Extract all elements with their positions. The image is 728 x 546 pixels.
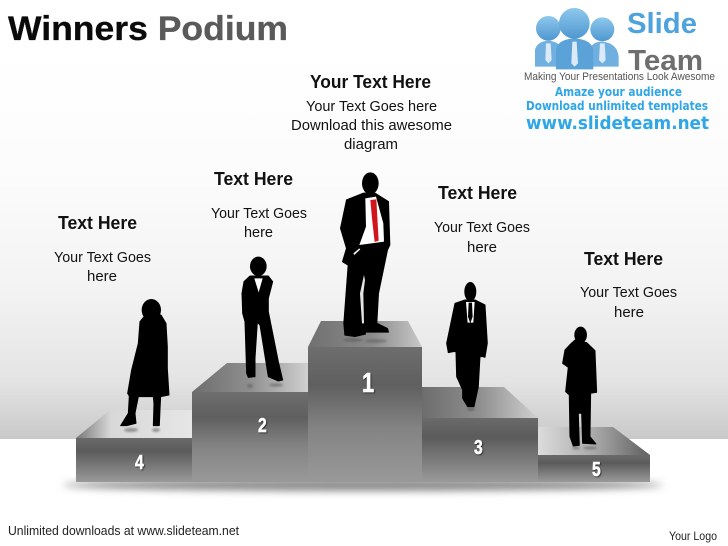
step 2 xyxy=(192,363,308,482)
red tie xyxy=(370,199,379,242)
logo url: www.slideteam.net xyxy=(526,113,709,134)
silhouette: man in suit, third place xyxy=(447,282,487,407)
icon: three business people xyxy=(535,8,619,69)
text block: second place: here xyxy=(244,224,273,241)
number 3: 3 xyxy=(474,436,483,458)
step 1 xyxy=(308,321,422,482)
number 4: 4 xyxy=(135,451,144,473)
shoe reflections xyxy=(124,338,597,450)
SlideTeam logo: Team xyxy=(628,45,703,77)
step 5 xyxy=(538,427,650,482)
number 2: 2 xyxy=(258,414,267,436)
text block: first place: Your Text Here xyxy=(310,72,431,92)
pocket highlight xyxy=(353,248,360,255)
text block: first place xyxy=(291,72,452,153)
title: Winners Podium xyxy=(8,10,288,48)
text block: fifth place: here xyxy=(614,304,644,321)
text block: second place xyxy=(211,169,307,241)
leg gap xyxy=(360,275,365,323)
text block: third place: here xyxy=(467,239,497,256)
text block: first place: diagram xyxy=(344,136,398,153)
text block: fourth place: Your Text Goes xyxy=(54,249,151,266)
shirt xyxy=(359,197,384,245)
SlideTeam logo: Download unlimited templates xyxy=(526,99,708,113)
text block: third place xyxy=(434,183,530,256)
silhouette: woman in dress, fourth place xyxy=(121,299,169,426)
step 4 xyxy=(76,410,192,482)
footer: downloads note: Unlimited downloads at www.slideteam.net xyxy=(8,523,239,538)
logo wordmark: Slide xyxy=(627,8,697,40)
logo promo text: Amaze your audience xyxy=(555,85,682,99)
silhouette: man on phone, fifth place xyxy=(563,327,597,446)
text block: fourth place: here xyxy=(87,268,117,285)
logo tagline: Making Your Presentations Look Awesome xyxy=(524,71,715,83)
text block: first place: Your Text Goes here xyxy=(306,98,437,115)
footer: your logo: Your Logo xyxy=(669,529,717,543)
podium shadow xyxy=(63,479,663,491)
text block: fourth place xyxy=(54,213,151,285)
number 5: 5 xyxy=(592,458,601,480)
text block: second place: Text Here xyxy=(214,169,293,189)
podium xyxy=(76,321,650,482)
step 3 xyxy=(422,387,538,482)
text block: fifth place xyxy=(580,249,677,321)
SlideTeam logo xyxy=(524,8,715,134)
text block: third place: Your Text Goes xyxy=(434,219,530,236)
podium numbers xyxy=(135,367,601,480)
text block: first place: Download this awesome xyxy=(291,117,452,134)
text block: fourth place: Text Here xyxy=(58,213,137,233)
text block: fifth place: Your Text Goes xyxy=(580,284,677,301)
silhouette: man with red tie, first place xyxy=(341,172,390,336)
text block: second place: Your Text Goes xyxy=(211,205,307,222)
text block: fifth place: Text Here xyxy=(584,249,663,269)
number 1: 1 xyxy=(362,367,374,399)
silhouette: woman in suit, second place xyxy=(242,257,283,381)
text block: third place: Text Here xyxy=(438,183,517,203)
